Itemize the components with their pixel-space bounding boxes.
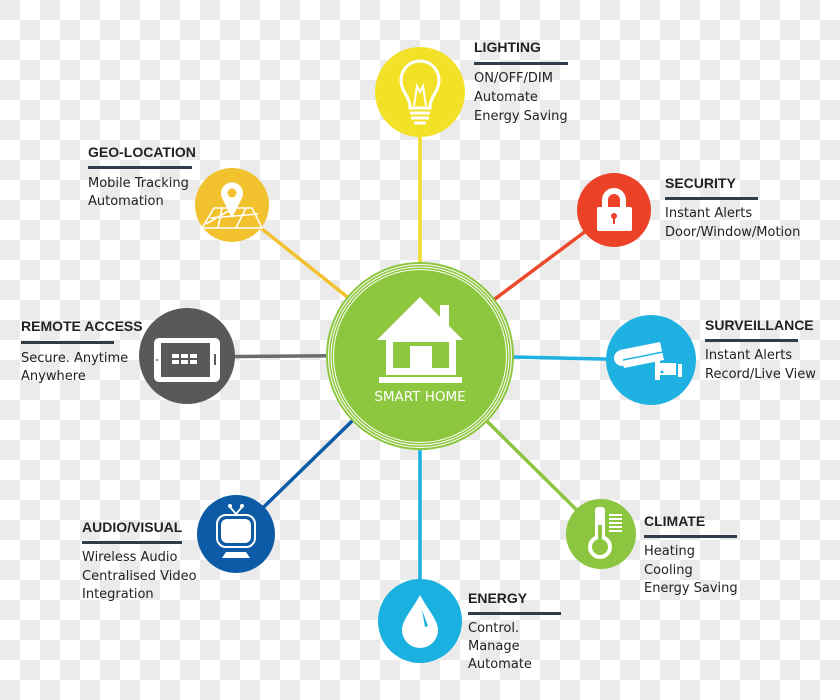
center hub: smart home — [326, 262, 514, 450]
text: audio/visual: AUDIO/VISUAL — [82, 519, 183, 535]
text: surveillance: Record/Live View — [705, 367, 816, 382]
node: audio/visual — [197, 495, 275, 573]
node: security — [577, 173, 651, 247]
text: audio/visual: Wireless Audio — [82, 550, 178, 565]
text: energy: Automate — [468, 657, 532, 672]
node: geo-location — [195, 168, 269, 242]
text: climate — [644, 513, 738, 596]
text: security: SECURITY — [665, 175, 736, 191]
text: audio/visual — [82, 519, 197, 602]
text: lighting: Energy Saving — [474, 109, 568, 124]
text: climate: Energy Saving — [644, 581, 738, 596]
text: energy: Control. — [468, 621, 519, 636]
icon: light bulb — [401, 61, 439, 123]
text: lighting: LIGHTING — [474, 39, 541, 55]
text: energy: Manage — [468, 639, 520, 654]
text: lighting: ON/OFF/DIM — [474, 71, 553, 86]
text: surveillance: SURVEILLANCE — [705, 317, 814, 333]
node: remote access — [139, 308, 235, 404]
text: energy — [468, 590, 561, 672]
text: security: Door/Window/Motion — [665, 225, 800, 240]
text: energy: ENERGY — [468, 590, 528, 606]
text: lighting — [474, 39, 568, 124]
text: audio/visual: Centralised Video — [82, 569, 197, 584]
text: geo-location: Automation — [88, 194, 164, 209]
text: geo-location: GEO-LOCATION — [88, 144, 196, 160]
text: geo-location: Mobile Tracking — [88, 176, 189, 191]
text: climate: CLIMATE — [644, 513, 705, 529]
text: climate: Heating — [644, 544, 695, 559]
text: security — [665, 175, 800, 240]
connector lines — [188, 92, 650, 621]
center hub: smart home: SMART HOME — [374, 389, 466, 405]
node: energy — [378, 579, 462, 663]
text: surveillance: Instant Alerts — [705, 348, 792, 363]
text: surveillance — [705, 317, 816, 382]
text: remote access: Secure. Anytime — [21, 351, 128, 366]
icon: house — [377, 297, 463, 383]
text: geo-location — [88, 144, 196, 209]
text: security: Instant Alerts — [665, 206, 752, 221]
text: lighting: Automate — [474, 90, 538, 105]
text: climate: Cooling — [644, 563, 693, 578]
node: climate — [566, 499, 636, 569]
text: remote access: REMOTE ACCESS — [21, 318, 143, 334]
text: remote access: Anywhere — [21, 369, 86, 384]
node: lighting — [375, 47, 465, 137]
text: remote access — [21, 318, 143, 384]
node: surveillance — [606, 315, 696, 405]
text: audio/visual: Integration — [82, 587, 154, 602]
